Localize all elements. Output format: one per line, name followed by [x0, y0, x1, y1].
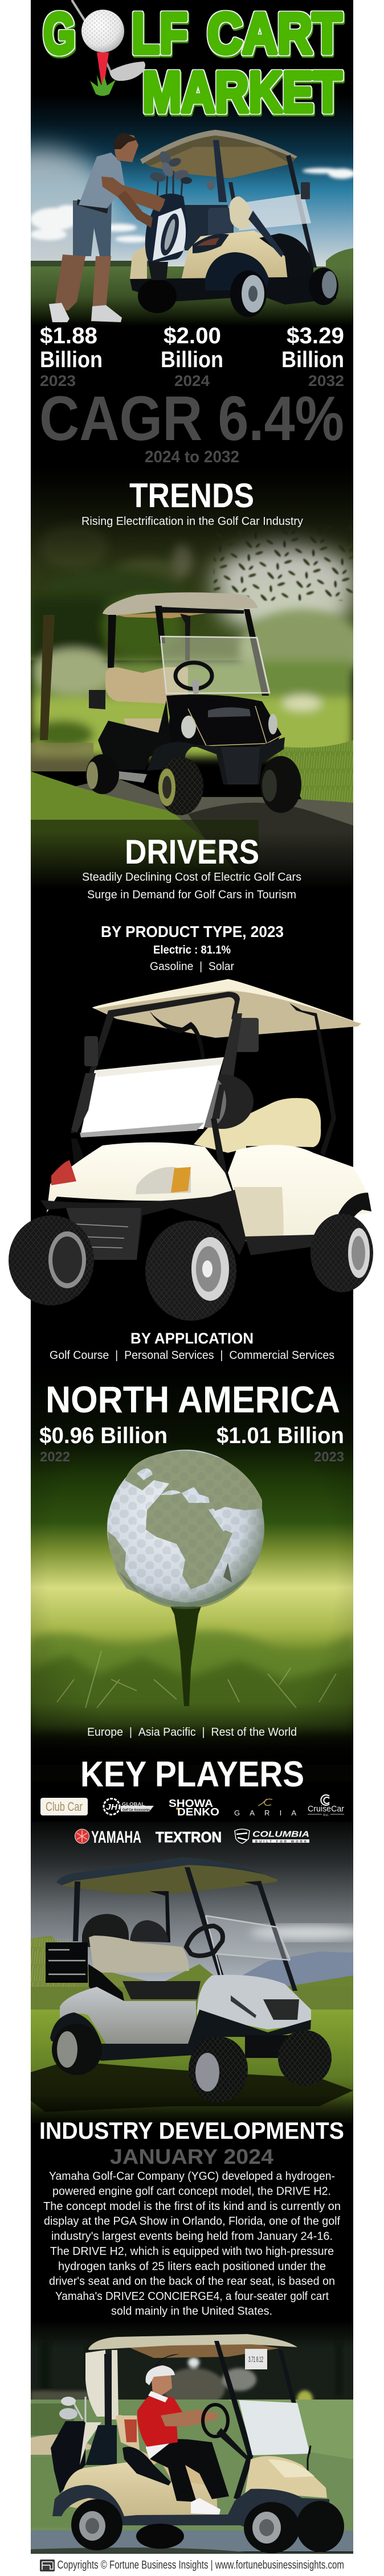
illustration: black golf cart	[86, 592, 301, 815]
heading: Drivers: DRIVERS	[125, 833, 259, 871]
logo: Club Car	[40, 1798, 88, 1815]
stat: North America 2023	[216, 1423, 344, 1465]
heading: By product type: Electric : 81.1%	[153, 944, 231, 956]
text block: January 2024 development: The concept model is the first of its kind and is currently on	[43, 2200, 341, 2213]
stat: 2032 market size: $3.29	[287, 323, 344, 348]
heading: By product type	[101, 923, 284, 973]
text block: January 2024 development: The DRIVE H2, which is equipped with two high-pressure	[50, 2245, 334, 2258]
stat: North America 2023: 2023	[314, 1449, 344, 1465]
heading: By product type: BY PRODUCT TYPE, 2023	[101, 923, 284, 940]
stat: 2023 market size: 2023	[40, 372, 76, 389]
heading: By product type: Gasoline | Solar	[150, 960, 234, 973]
icon: golf ball on tee with club	[72, 0, 145, 96]
icon: Fortune Business Insights logo	[40, 2559, 55, 2571]
illustration: cream golf cart with driver	[51, 2334, 344, 2553]
logo: Club Car: Club Car	[46, 1799, 83, 1814]
heading: Industry developments: INDUSTRY DEVELOPMENTS	[39, 2117, 344, 2144]
heading: By application: BY APPLICATION	[130, 1330, 254, 1347]
logo: CruiseCar: Inc.	[323, 1814, 329, 1817]
title: Golf Cart Market: MARKET	[142, 60, 342, 124]
stat: CAGR: 2024 to 2032	[145, 448, 239, 466]
text block: January 2024 development: Yamaha's DRIVE2 CONCIERGE4, a four-seater golf cart	[55, 2290, 329, 2303]
logo: Showa Denko: SHOWA	[169, 1798, 213, 1809]
heading: North America: NORTH AMERICA	[46, 1378, 340, 1420]
heading: Trends: TRENDS	[129, 476, 254, 515]
stat: 2024 market size: 2024	[174, 372, 210, 389]
stat: 2024 market size: $2.00	[164, 323, 221, 348]
heading: Trends	[81, 476, 303, 528]
text block: January 2024 development: hydrogen tanks of 25 liters each positioned under the	[58, 2260, 326, 2273]
section: golfer driving cart scene	[31, 2320, 353, 2554]
stat: North America 2022	[39, 1423, 168, 1465]
logo: Yamaha: YAMAHA	[91, 1828, 141, 1847]
stat: 2023 market size	[40, 323, 103, 389]
heading: Trends: Rising Electrification in the Golf Car Industry	[81, 515, 303, 528]
title: Golf Cart Market: LF	[132, 2, 187, 65]
logo: Textron: TEXTRON	[156, 1829, 222, 1846]
icon: golf ball globe on tee	[107, 1449, 264, 1706]
logo: Garia	[234, 1799, 296, 1817]
logo: Columbia: COLUMBIA	[252, 1830, 309, 1839]
heading: By application	[50, 1330, 334, 1362]
stat: 2032 market size: 2032	[308, 372, 344, 389]
heading: Key players: KEY PLAYERS	[80, 1755, 304, 1794]
stat: 2024 market size	[161, 323, 223, 389]
logo: Showa Denko	[169, 1798, 219, 1818]
text: other regions: Europe | Asia Pacific | Rest of the World	[87, 1726, 297, 1739]
logo: JH Global	[104, 1799, 154, 1815]
stat: CAGR: CAGR 6.4%	[39, 384, 344, 454]
section: golf ball globe scene	[31, 1399, 353, 1744]
heading: Industry developments: JANUARY 2024	[110, 2145, 273, 2168]
stat: North America 2022: 2022	[40, 1449, 70, 1465]
logo: CruiseCar	[308, 1795, 344, 1817]
heading: By application: Golf Course | Personal Services | Commercial Services	[50, 1349, 334, 1362]
stat: North America 2023: $1.01 Billion	[216, 1423, 344, 1448]
section: silver golf cart scene	[31, 1822, 365, 2129]
heading: Drivers: Surge in Demand for Golf Cars in Tourism	[87, 889, 296, 901]
heading: Industry developments	[39, 2117, 344, 2168]
stat: 2032 market size	[281, 323, 344, 389]
illustration: golfer	[49, 133, 165, 322]
stat: North America 2022: $0.96 Billion	[39, 1423, 168, 1448]
illustration: golf cart with beige body	[130, 130, 338, 317]
logo: JH Global: JH	[106, 1802, 118, 1812]
title: Golf Cart Market: G	[43, 2, 75, 65]
section: trends and drivers scene	[31, 467, 365, 889]
heading: Drivers: Steadily Declining Cost of Electric Golf Cars	[82, 871, 301, 884]
illustration: golf bag and clubs	[145, 149, 215, 280]
illustration: cream golf cart with driver: 3.71 8.12	[248, 2355, 263, 2364]
section: hero scene	[31, 101, 353, 323]
text block: January 2024 development: sold mainly in the United States.	[111, 2305, 272, 2318]
logo: Garia: GARIA	[234, 1809, 296, 1817]
text block: January 2024 development: industry's largest events being held from January 24-16.	[51, 2230, 333, 2243]
text block: January 2024 development: display at the PGA Show in Orlando, Florida, one of the golf	[44, 2215, 340, 2228]
illustration: white golf cart	[9, 979, 373, 1321]
heading: Drivers	[82, 833, 301, 901]
text block: January 2024 development: powered engine golf cart concept model, the DRIVE H2.	[52, 2185, 331, 2197]
logo: Yamaha	[75, 1828, 141, 1847]
logo: JH Global: Golf Car Accessories	[122, 1809, 150, 1812]
illustration: silver golf cart	[46, 1858, 332, 2102]
text block: January 2024 development	[43, 2170, 341, 2318]
stat: 2032 market size: Billion	[281, 347, 344, 372]
title: Golf Cart Market	[43, 2, 342, 124]
text block: January 2024 development: driver's seat and on the back of the rear seat, is based on	[49, 2275, 335, 2287]
title: Golf Cart Market: CART	[207, 2, 342, 65]
stat: 2023 market size: $1.88	[40, 323, 97, 348]
stat: 2024 market size: Billion	[161, 347, 223, 372]
logo: Columbia	[235, 1829, 309, 1843]
logo: Columbia: BUILT FOR WORK	[255, 1840, 307, 1843]
stat: 2023 market size: Billion	[40, 347, 103, 372]
logo: CruiseCar: CruiseCar	[308, 1804, 344, 1814]
text block: January 2024 development: Yamaha Golf-Car Company (YGC) developed a hydrogen-	[49, 2170, 335, 2183]
logo: Showa Denko: DENKO	[177, 1806, 219, 1818]
logo: JH Global: GLOBAL	[122, 1802, 145, 1807]
